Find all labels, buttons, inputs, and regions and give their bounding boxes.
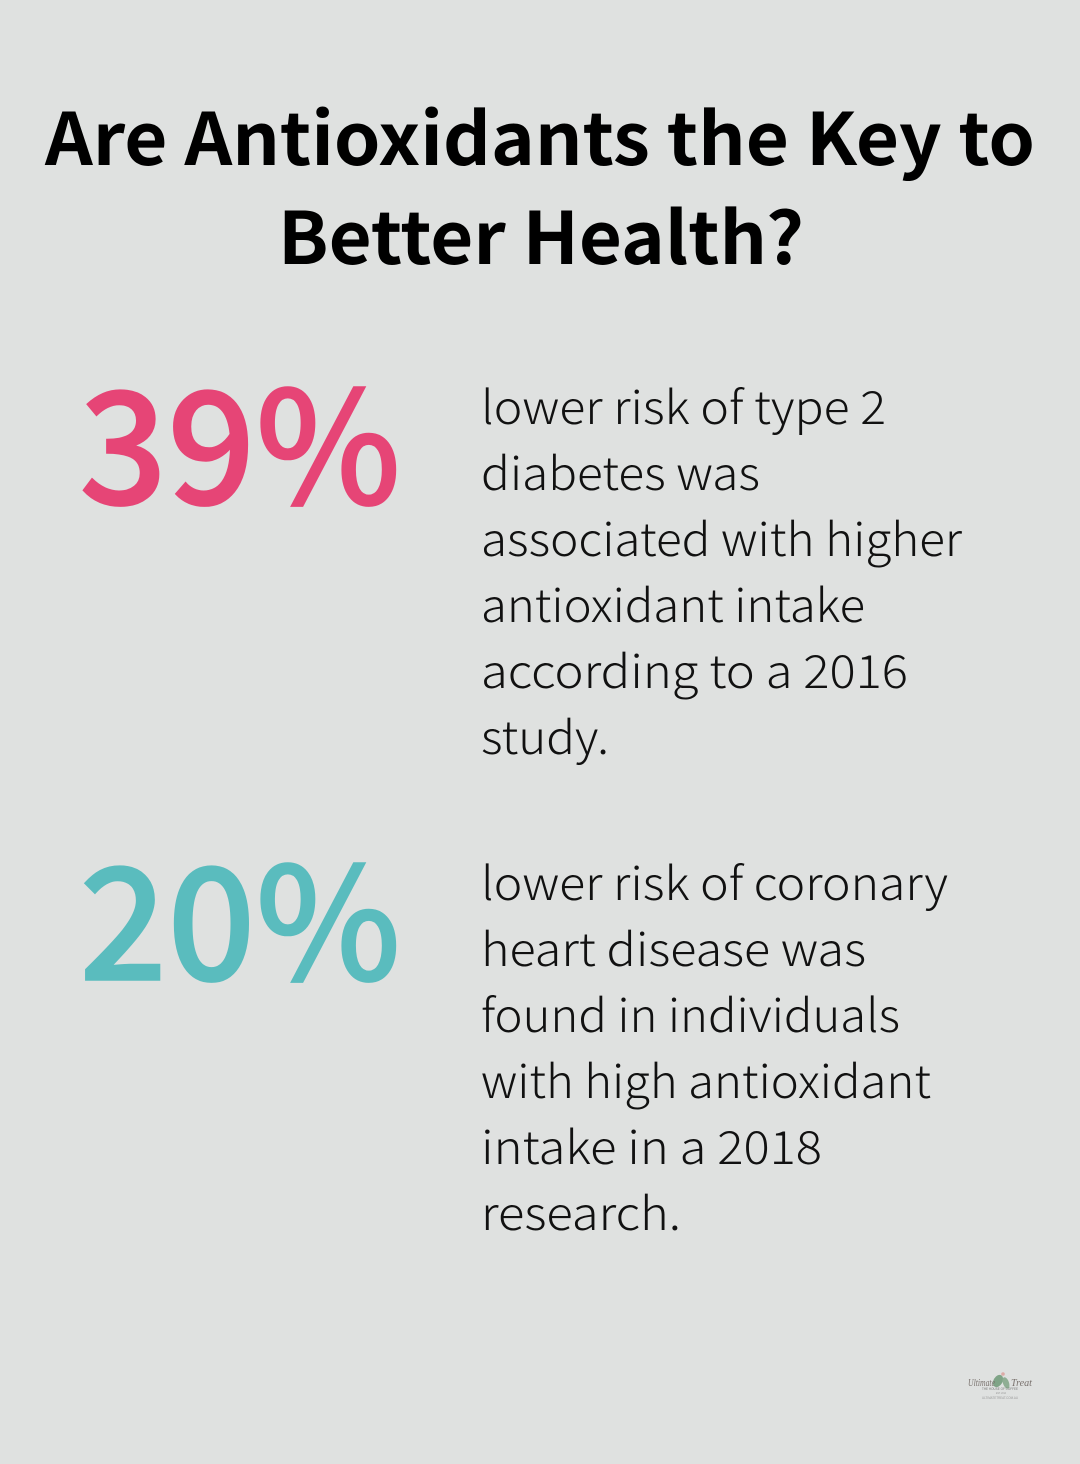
icon: leaves: [991, 1372, 1011, 1390]
description: type 2 diabetes: antioxidant intake: [481, 570, 865, 636]
description: type 2 diabetes: associated with higher: [481, 504, 962, 570]
statistic: 20%: 20%: [79, 799, 401, 1025]
logo: Ultimate Treat: Treat: [1011, 1377, 1033, 1389]
logo: Ultimate Treat: Ultimate: [968, 1377, 995, 1389]
title: [44, 81, 1035, 285]
logo: Ultimate Treat: [968, 1372, 1033, 1400]
description: coronary heart disease: with high antioxidant: [481, 1046, 931, 1112]
description: coronary heart disease: heart disease was: [481, 914, 866, 980]
title: Better Health?: [278, 180, 804, 285]
logo: Ultimate Treat: ULTIMATETREAT.COM.AU: [982, 1396, 1018, 1400]
statistic: 39%: 39%: [79, 323, 401, 549]
description: coronary heart disease: lower risk of coronary: [481, 848, 948, 914]
description: type 2 diabetes: [481, 372, 962, 768]
logo: Ultimate Treat: THE HOUSE OF COFFEE: [982, 1387, 1019, 1391]
description: coronary heart disease: [481, 848, 948, 1244]
title: Are Antioxidants the Key to: [44, 81, 1035, 186]
description: type 2 diabetes: diabetes was: [481, 438, 760, 504]
description: coronary heart disease: found in individuals: [481, 980, 900, 1046]
description: type 2 diabetes: lower risk of type 2: [481, 372, 886, 438]
description: type 2 diabetes: according to a 2016: [481, 636, 908, 702]
description: coronary heart disease: research.: [481, 1178, 681, 1244]
logo: Ultimate Treat: EST. 2014: [996, 1391, 1006, 1395]
description: type 2 diabetes: study.: [481, 702, 609, 768]
description: coronary heart disease: intake in a 2018: [481, 1112, 822, 1178]
